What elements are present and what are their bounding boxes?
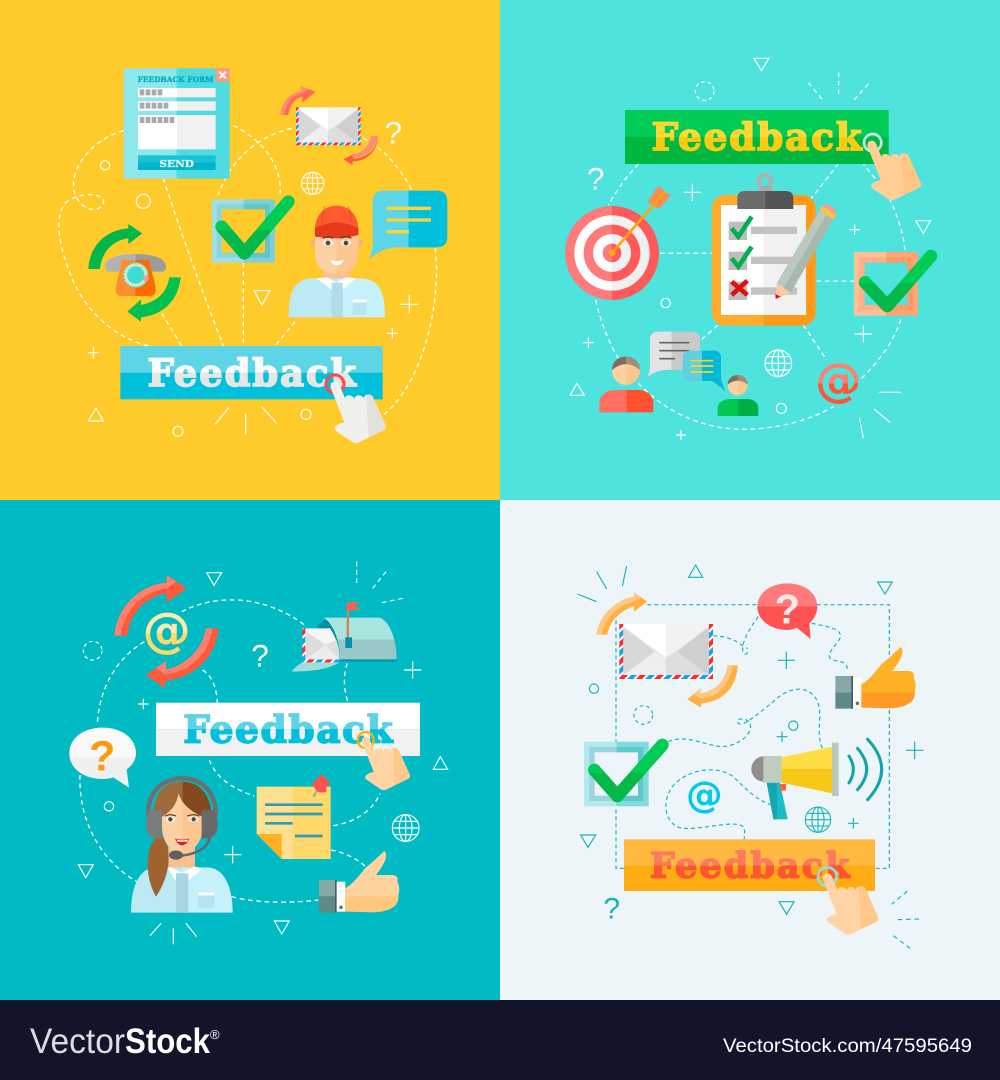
feedback button: Feedback (148, 351, 357, 395)
megaphone with sound waves (751, 738, 882, 819)
red question bubble (757, 583, 817, 639)
speech bubble (369, 191, 447, 259)
click ring and pointing hand (864, 134, 921, 200)
question mark: ? (587, 160, 604, 196)
feedback form window: SEND (159, 159, 194, 170)
VectorStock logo: Vector (30, 1022, 125, 1061)
check box (584, 742, 662, 806)
question mark: ? (603, 892, 620, 925)
decorative marks (78, 562, 448, 944)
envelope with orange circular arrows (597, 592, 738, 707)
courier man in red cap (289, 206, 385, 317)
feedback button (625, 110, 889, 164)
globe icon (392, 815, 419, 841)
at sign with red circular arrows (114, 575, 218, 688)
click ring and pointing hand (358, 732, 410, 790)
thumbs up hand (835, 647, 916, 709)
question speech bubble: ? (89, 733, 115, 781)
panel: form and courier on yellow (0, 0, 500, 500)
VectorStock logo: ® (210, 1027, 220, 1042)
image id url: VectorStock.com/47595649 (723, 1035, 972, 1057)
question mark: ? (251, 638, 269, 674)
pale blue panel background (500, 500, 1000, 1000)
panel: megaphone and mail on pale blue (500, 500, 1000, 1000)
yellow panel background (0, 0, 500, 500)
question mark: ? (385, 114, 402, 150)
two people talking (599, 332, 758, 416)
VectorStock logo: Stock (125, 1022, 210, 1061)
telephone with green arrows (88, 224, 181, 322)
check box (212, 199, 288, 263)
target with arrow (565, 186, 671, 300)
panel: call center operator on teal (0, 500, 500, 1000)
feedback button: Feedback (652, 115, 863, 159)
teal panel background (0, 500, 500, 1000)
feedback button (120, 346, 383, 399)
envelope with red circular arrows (281, 86, 378, 165)
question speech bubble (69, 728, 136, 788)
panel: checklist and target on turquoise (500, 0, 1000, 500)
red question bubble: ? (775, 585, 800, 632)
decorative marks (577, 565, 923, 948)
mailbox with envelope (292, 602, 397, 672)
thumbs up hand (319, 851, 399, 913)
feedback form window (124, 68, 230, 179)
globe icon (805, 807, 831, 832)
feedback button (624, 839, 875, 891)
footer band (0, 1000, 1000, 1080)
decorative marks (570, 58, 931, 440)
feedback button: Feedback (183, 708, 394, 752)
sticky note with pin (257, 774, 331, 859)
call center woman with headset (131, 778, 233, 913)
VectorStock logo (30, 1022, 220, 1061)
globe icon (301, 172, 324, 195)
decorative marks (88, 161, 419, 436)
globe icon (765, 350, 792, 377)
triangle marker (254, 291, 270, 305)
at sign: @ (815, 354, 862, 408)
blue at sign: @ (686, 773, 723, 816)
feedback form window: FEEDBACK FORM (138, 75, 214, 84)
feedback button: Feedback (650, 846, 850, 887)
turquoise panel background (500, 0, 1000, 500)
click ring and pointing hand (818, 867, 878, 935)
click ring and pointing hand (326, 375, 386, 443)
pencil (775, 204, 836, 299)
check box (854, 252, 931, 316)
at sign with red circular arrows: @ (143, 602, 191, 658)
feedback button (156, 703, 420, 756)
clipboard checklist (712, 175, 816, 326)
